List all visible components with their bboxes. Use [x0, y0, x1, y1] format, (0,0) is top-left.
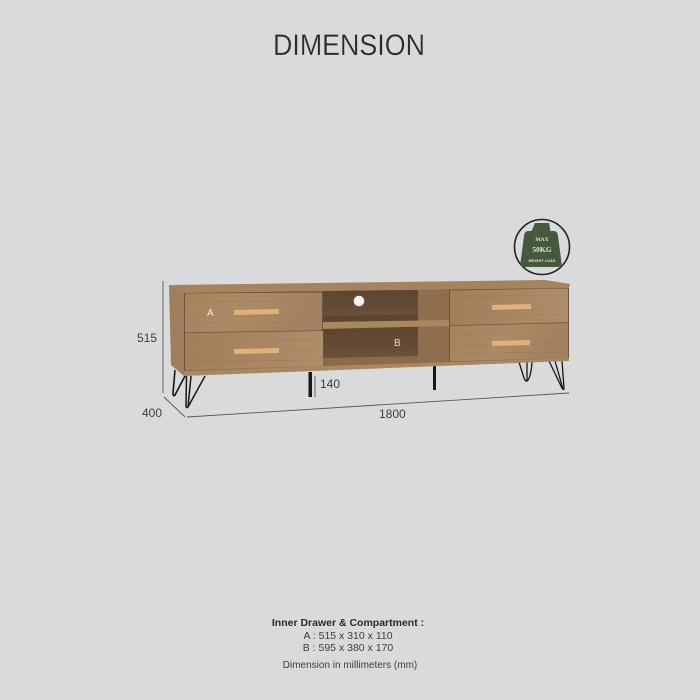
leg: centre left [308, 372, 312, 397]
units note: Dimension in millimeters (mm) [283, 660, 417, 671]
drawer top right [450, 288, 568, 325]
drawer handle top left [234, 309, 279, 315]
drawer handle bottom right [492, 340, 530, 346]
leg: centre right [433, 366, 436, 390]
cable hole [354, 296, 364, 306]
drawer bottom left [185, 331, 323, 370]
compartment B size: B : 595 x 380 x 170 [303, 642, 393, 654]
dimension lines [163, 281, 569, 417]
compartment label B: B [394, 338, 401, 349]
drawer handle bottom left [234, 348, 279, 354]
label: width 1800: 1800 [379, 407, 406, 421]
label: height 515: 515 [137, 331, 157, 345]
legs: right hairpin front [549, 361, 564, 390]
shelf shadow [323, 314, 418, 322]
compartment label A: A [207, 308, 214, 319]
drawer handle top right [492, 304, 531, 310]
drawer A top left [185, 292, 322, 332]
side panel [169, 285, 184, 376]
legs: left hairpin rear [173, 370, 186, 396]
middle shelf [323, 320, 449, 329]
drawer bottom right [450, 323, 568, 362]
legs: right hairpin rear [519, 362, 532, 381]
plinth [184, 358, 569, 376]
icon: max 50kg weight load badge: WEIGHT LOAD [528, 259, 556, 263]
icon: max 50kg weight load badge [514, 220, 570, 274]
legs: left hairpin front [186, 376, 205, 408]
inner right wall [418, 289, 449, 363]
lower shelf shadow [323, 356, 418, 366]
tv console furniture [169, 280, 570, 408]
wood grain [186, 296, 567, 362]
inner drawer and compartment notes [272, 617, 424, 671]
top surface [169, 280, 570, 293]
notes heading: Inner Drawer & Compartment : [272, 617, 424, 629]
compartment A size: A : 515 x 310 x 110 [303, 630, 393, 642]
lower compartment back [323, 326, 418, 366]
upper compartment back [323, 290, 418, 322]
icon: max 50kg weight load badge: 50KG [532, 245, 552, 254]
icon: max 50kg weight load badge: MAX [535, 237, 549, 243]
title: DIMENSION [273, 29, 425, 62]
label: leg height 140: 140 [320, 377, 340, 391]
dark body behind drawers [184, 287, 569, 373]
label: depth 400: 400 [142, 406, 162, 420]
